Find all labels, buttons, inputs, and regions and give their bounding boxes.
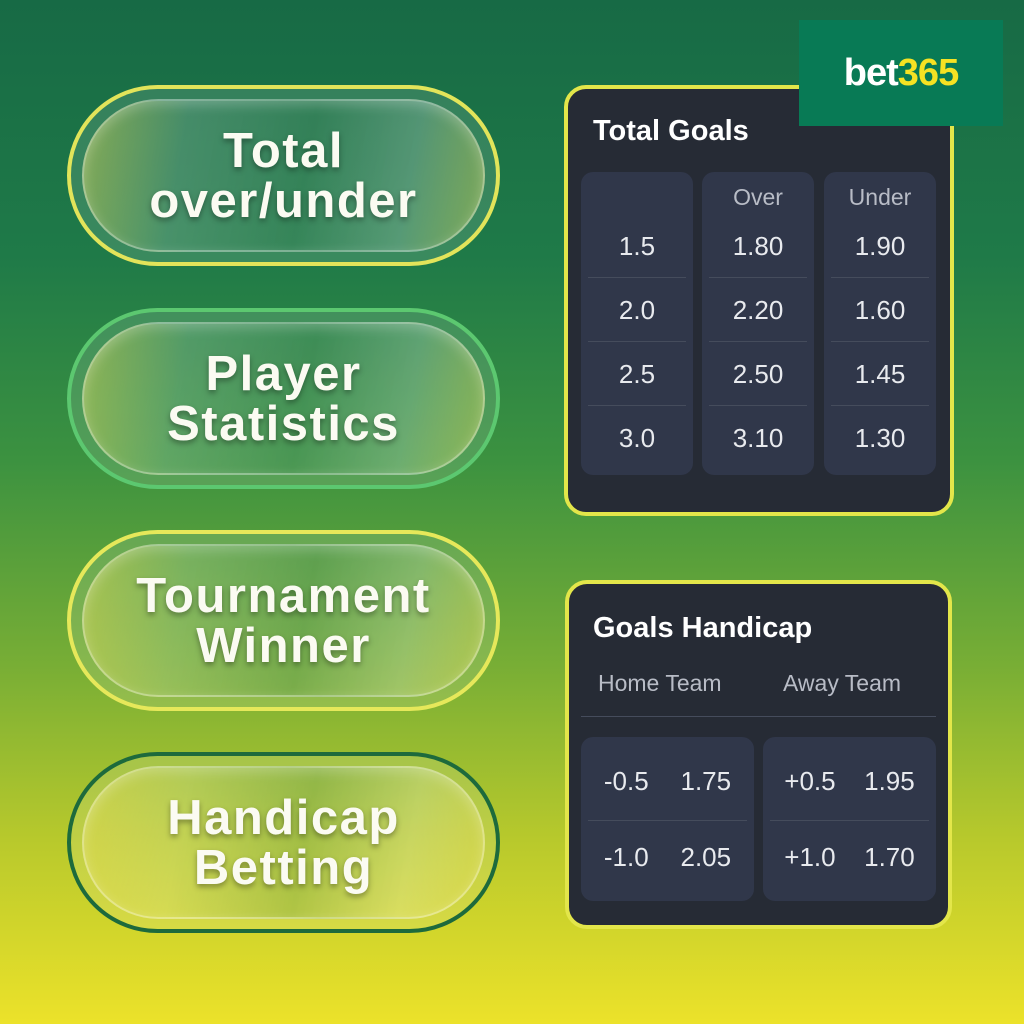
box: Home Team odds: -0.5: [604, 766, 649, 796]
logo: bet365: [799, 20, 1003, 126]
heading: Goals Handicap: Goals Handicap: [593, 612, 812, 644]
column: lines: [581, 172, 693, 475]
column: Under: 1.90: [855, 231, 905, 261]
box: Away Team odds: [763, 737, 936, 901]
logo: bet365: bet365: [844, 52, 958, 94]
box: Away Team odds: +1.0: [784, 842, 836, 872]
column: Under: 1.60: [855, 295, 905, 325]
column: lines: 2.0: [619, 295, 655, 325]
column: Under: 1.45: [855, 359, 905, 389]
column: Under: Under: [849, 184, 911, 210]
box: Away Team odds: 1.70: [864, 842, 915, 872]
box: Away Team odds: 1.95: [864, 766, 915, 796]
pill: Tournament Winner: Winner: [196, 618, 371, 672]
box: Home Team odds: [581, 737, 754, 901]
pill: Tournament Winner: [67, 530, 500, 711]
box: Home Team odds: -1.0: [604, 842, 649, 872]
pill: Total over/under: over/under: [149, 174, 418, 228]
pill: Total over/under: [67, 85, 500, 266]
pill: Player Statistics: [67, 308, 500, 489]
column headers: Away Team: [783, 670, 901, 696]
pill: Player Statistics: Statistics: [167, 396, 400, 450]
column: Under: 1.30: [855, 423, 905, 453]
column: lines: 1.5: [619, 231, 655, 261]
box: Home Team odds: 1.75: [680, 766, 731, 796]
column: Over: 1.80: [733, 231, 783, 261]
pill: Handicap Betting: Betting: [194, 840, 373, 894]
pill: Handicap Betting: Handicap: [167, 790, 400, 844]
column: Over: 3.10: [733, 423, 783, 453]
column: lines: 3.0: [619, 423, 655, 453]
heading: Total Goals: Total Goals: [593, 115, 749, 147]
column: lines: 2.5: [619, 359, 655, 389]
pill: Handicap Betting: [67, 752, 500, 933]
column: Under: [824, 172, 936, 475]
pill: Total over/under: Total: [223, 124, 344, 178]
column: Over: 2.50: [733, 359, 783, 389]
column: Over: Over: [733, 184, 783, 210]
panel: Goals Handicap: [565, 580, 952, 929]
column headers: [598, 670, 901, 696]
box: Home Team odds: 2.05: [680, 842, 731, 872]
column: Over: [702, 172, 814, 475]
panel: Total Goals: [564, 85, 954, 516]
box: Away Team odds: +0.5: [784, 766, 836, 796]
column: Over: 2.20: [733, 295, 783, 325]
pill: Tournament Winner: Tournament: [136, 568, 431, 622]
column headers: Home Team: [598, 670, 722, 696]
pill: Player Statistics: Player: [205, 346, 362, 400]
